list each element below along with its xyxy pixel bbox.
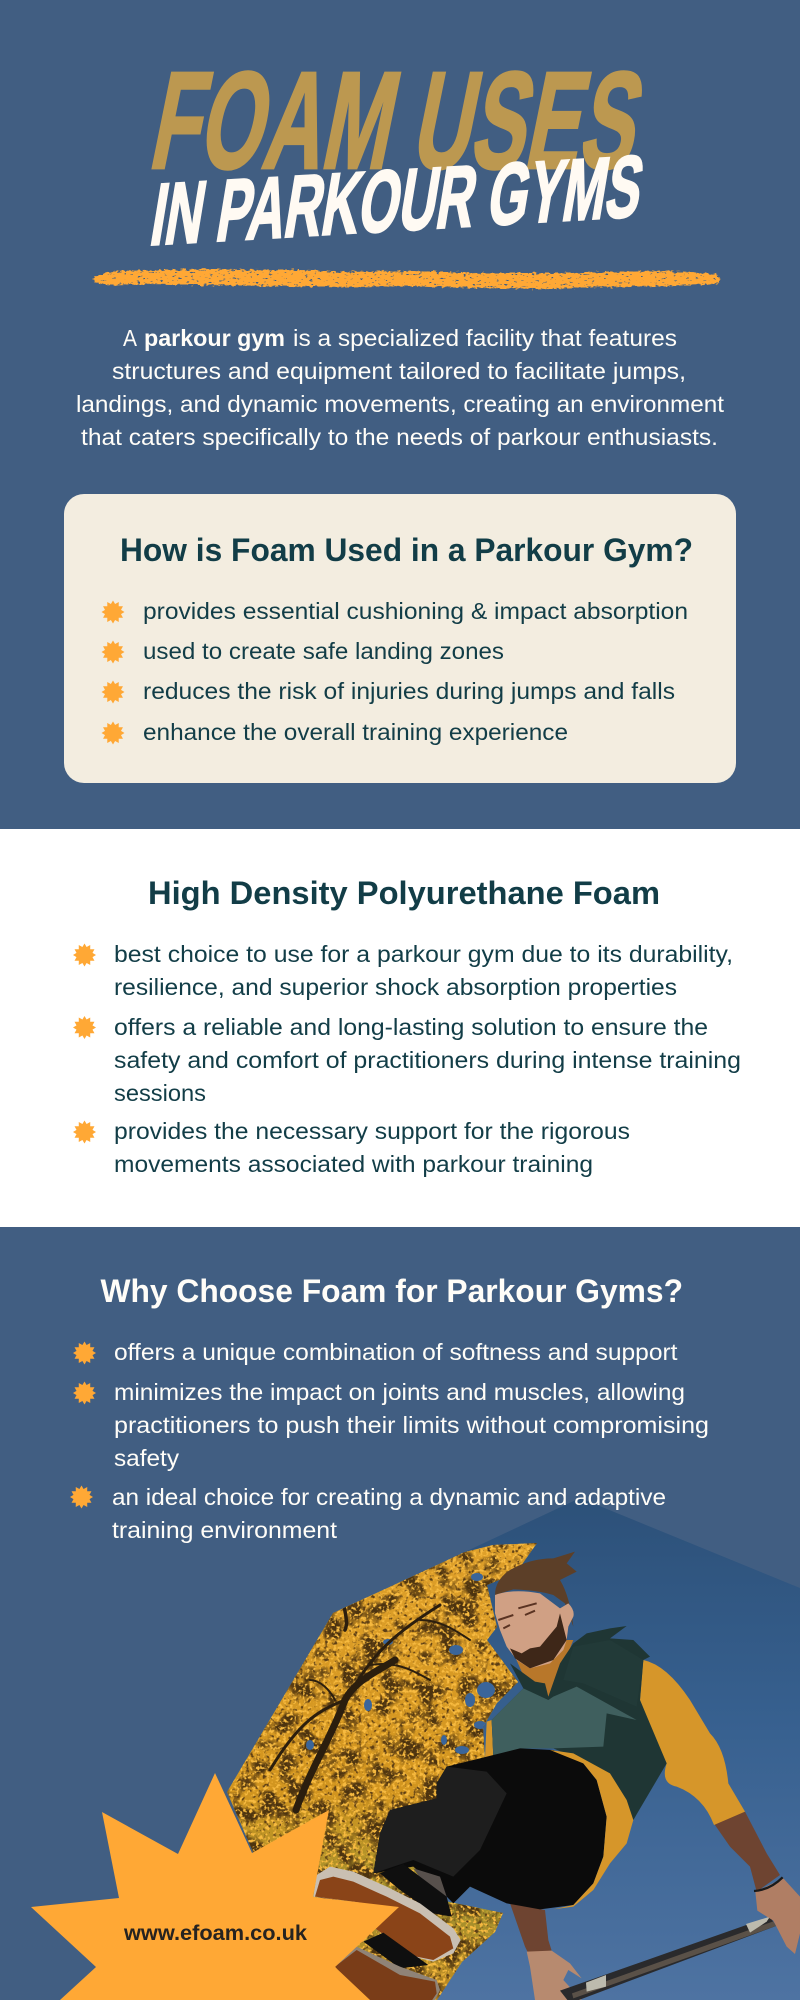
far shoe — [363, 1933, 428, 1968]
title — [141, 45, 656, 264]
title line: FOAM USES: FOAM USES — [141, 45, 656, 198]
panel: high density polyurethane foam — [0, 829, 800, 1227]
intro paragraph: A — [123, 325, 137, 351]
intro paragraph: that caters specifically to the needs of parkour enthusiasts. — [81, 424, 718, 450]
autumn tree — [200, 1540, 540, 2000]
intro paragraph: is a specialized facility that features — [293, 325, 677, 351]
panel: why choose foam (blue section) — [0, 1227, 800, 2000]
bullet list: provides the necessary support for the rigorous — [114, 1118, 630, 1144]
intro paragraph: parkour gym — [144, 325, 285, 351]
bullet list: why choose foam: minimizes the impact on joints and muscles, allowing — [114, 1379, 685, 1405]
bullet list: used to create safe landing zones — [143, 638, 504, 664]
sky — [437, 1499, 800, 2000]
website url: www.efoam.co.uk — [123, 1922, 307, 1945]
hair — [495, 1552, 577, 1627]
bullet list: offers a reliable and long-lasting solution to ensure the — [114, 1014, 708, 1040]
bullet list: why choose foam: practitioners to push their limits without compromising — [114, 1412, 709, 1438]
eyes and brows — [498, 1603, 537, 1628]
bullet list: sessions — [114, 1080, 206, 1106]
bullet list: resilience, and superior shock absorption properties — [114, 974, 677, 1000]
bullet list: provides essential cushioning & impact absorption — [143, 598, 688, 624]
bullet list — [73, 941, 741, 1177]
bullet list: movements associated with parkour training — [114, 1151, 593, 1177]
legs — [373, 1748, 607, 1909]
far arm and hand — [510, 1903, 582, 2000]
bullet list: best choice to use for a parkour gym due to its durability, — [114, 941, 733, 967]
face — [495, 1591, 574, 1668]
bullet list: enhance the overall training experience — [143, 719, 568, 745]
intro paragraph: landings, and dynamic movements, creating an environment — [76, 391, 724, 417]
bullet list: why choose foam — [70, 1339, 709, 1543]
title line: IN PARKOUR GYMS: IN PARKOUR GYMS — [145, 138, 650, 264]
heading: why choose foam: Why Choose Foam for Parkour Gyms? — [100, 1273, 683, 1309]
vest — [492, 1626, 667, 1820]
bullet list: safety and comfort of practitioners during intense training — [114, 1047, 741, 1073]
near forearm and hand — [713, 1812, 800, 1954]
bullet list: why choose foam: safety — [114, 1445, 179, 1471]
near shoe — [313, 1864, 461, 2000]
bullet list: why choose foam: training environment — [112, 1517, 337, 1543]
starburst badge with website — [31, 1773, 399, 2000]
bullet list: why choose foam: offers a unique combination of softness and support — [114, 1339, 678, 1365]
bullet list: why choose foam: an ideal choice for creating a dynamic and adaptive — [112, 1484, 666, 1510]
sweatshirt sleeve — [640, 1660, 745, 1825]
brush stroke underline — [92, 269, 720, 289]
intro paragraph — [76, 325, 724, 450]
panel: how foam is used — [64, 494, 736, 783]
neck — [515, 1640, 573, 1699]
intro paragraph: structures and equipment tailored to facilitate jumps, — [112, 358, 686, 384]
photo: athlete jumping against sky and autumn tree — [200, 1490, 800, 2000]
heading: How is Foam Used in a Parkour Gym? — [120, 532, 693, 568]
bullet list — [102, 598, 688, 745]
beard — [510, 1613, 567, 1668]
bar — [560, 1917, 776, 2000]
athlete — [313, 1552, 800, 2000]
shirt hem — [550, 1750, 633, 1909]
heading: High Density Polyurethane Foam — [148, 875, 660, 911]
background: top blue section — [0, 0, 800, 829]
bullet list: reduces the risk of injuries during jumps and falls — [143, 678, 675, 704]
